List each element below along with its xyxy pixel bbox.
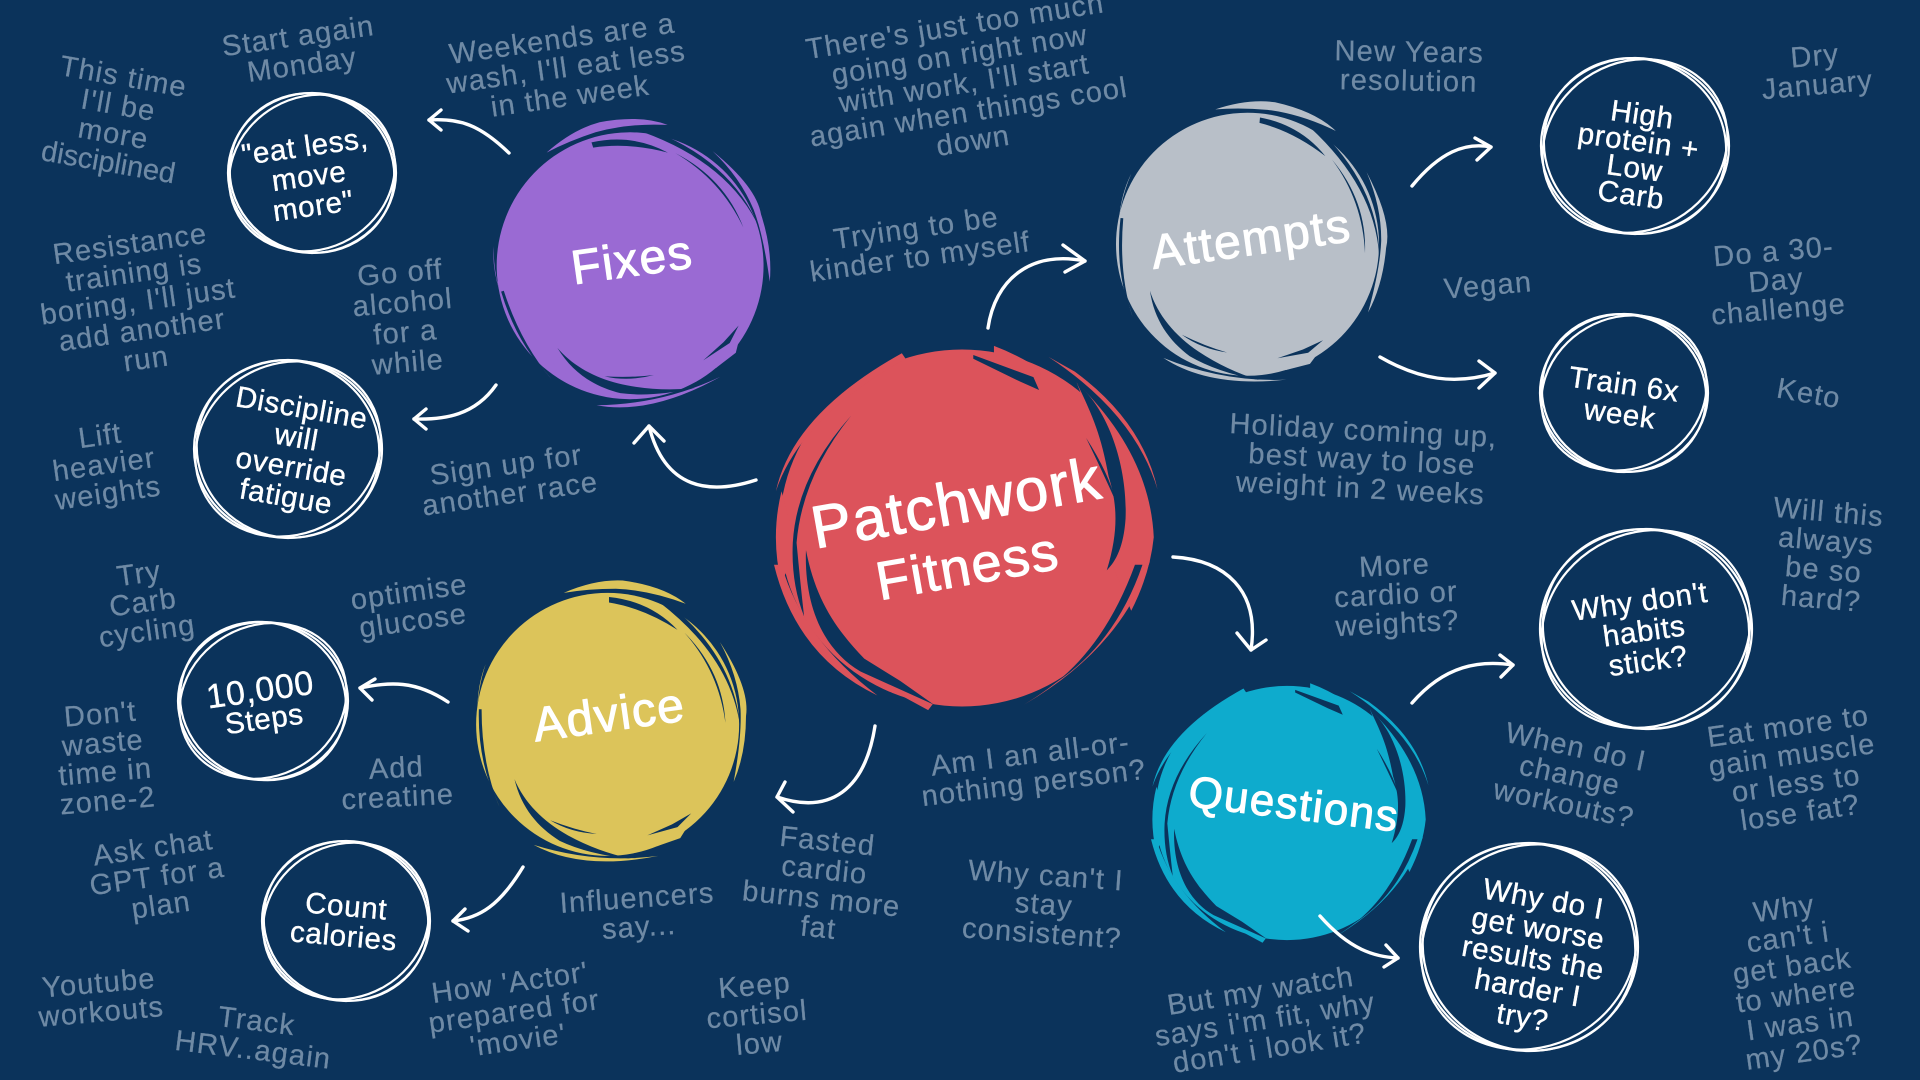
- callout: Why do I get worse results the harder I try?: try?: [1494, 997, 1551, 1038]
- note: Fasted cardio burns more fat: cardio: [780, 850, 869, 891]
- note: Ask chat GPT for a plan: Ask chat: [91, 824, 215, 873]
- note: This time I'll be more disciplined: I'll be: [79, 83, 158, 128]
- note: Start again Monday: Monday: [245, 42, 359, 89]
- arrow: Attempts to Train 6x: [1380, 357, 1495, 388]
- note: Weekends are a wash: wash, I'll eat less: [444, 35, 688, 101]
- circle: Questions: [1151, 683, 1428, 943]
- callout: Why do I get worse results the harder I try?: [1384, 805, 1674, 1080]
- note: Am I an all-or-nothing person?: Am I an all-or-: [929, 727, 1132, 783]
- note: Resistance training is boring: boring, I'll just: [38, 272, 238, 332]
- callout: Train 6x week: Train 6x: [1567, 361, 1681, 409]
- circle: Patchwork Fitness: [774, 346, 1158, 710]
- arrow: Questions to Why do I get worse: [1320, 916, 1398, 967]
- callout: Why do I get worse results the harder I try?: get worse: [1469, 901, 1607, 957]
- callout: Train 6x week: [1513, 286, 1735, 500]
- note: Dry January: January: [1760, 65, 1874, 106]
- note: How 'Actor' prepared: 'movie': [468, 1018, 568, 1063]
- note: Why can't i get back to where I was in my 20s?: can't i: [1745, 916, 1832, 960]
- note: Don't waste time in zone-2: waste: [60, 724, 145, 763]
- note: Will this always be so hard?: hard?: [1780, 580, 1862, 619]
- note: Keep cortisol low: Keep: [717, 967, 792, 1005]
- callout: eat less, move more: move: [270, 155, 348, 198]
- note: This time I'll be more disciplined: disciplined: [39, 135, 178, 190]
- note: But my watch says i'm fit: says i'm fit, why: [1153, 987, 1378, 1053]
- callout: 10,000 Steps: 10,000: [204, 664, 316, 716]
- circle: Advice: [476, 580, 746, 861]
- note: Why can't i get back to where I was in my 20s?: get back: [1731, 942, 1853, 991]
- circle: Advice: Advice: [530, 679, 689, 752]
- note: Try Carb cycling: Carb: [107, 582, 179, 624]
- callout: Why don't habits stick?: Why don't: [1570, 576, 1710, 628]
- callout: High protein + Low Carb: Low: [1605, 148, 1665, 189]
- callout: Why don't habits stick?: stick?: [1607, 639, 1690, 683]
- callout: eat less, move more: "eat less,: [240, 122, 370, 172]
- note: Fasted cardio burns more fat: fat: [799, 910, 838, 946]
- note: Resistance training is boring: training is: [64, 248, 204, 299]
- callout: High protein + Low Carb: Carb: [1596, 174, 1666, 216]
- note: Eat more to gain muscle: Eat more to: [1705, 700, 1871, 754]
- note: optimise glucose: optimise: [349, 569, 470, 617]
- note: When do I change workouts?: change: [1516, 750, 1623, 802]
- note: Try Carb cycling: cycling: [97, 609, 197, 654]
- note: Track HRV..again: Track: [216, 1001, 297, 1042]
- callout: Discipline will override fatigue: [163, 328, 413, 570]
- callout: Count calories: Count: [304, 887, 389, 927]
- arrow: Fixes to eat less: [429, 110, 509, 153]
- note: Don't waste time in zone-2: zone-2: [59, 781, 157, 821]
- callout: Discipline will override fatigue: will: [271, 417, 321, 458]
- note: Lift heavier weights: weights: [52, 470, 163, 517]
- note: Keep cortisol low: low: [735, 1026, 784, 1062]
- note: optimise glucose: glucose: [357, 598, 469, 645]
- note: Holiday coming up: weight in 2 weeks: [1234, 466, 1486, 511]
- note: Trying to be kinder: kinder to myself: [808, 226, 1032, 289]
- note: How 'Actor' prepared: prepared for: [427, 984, 602, 1040]
- note: This time I'll be more disciplined: more: [76, 112, 151, 156]
- note: Am I an all-or-nothing person?: nothing person?: [920, 754, 1148, 813]
- note: There's just too much: down: [934, 120, 1012, 163]
- note: Do a 30-Day challenge: challenge: [1710, 288, 1847, 332]
- note: When do I change workouts?: workouts?: [1490, 774, 1637, 835]
- note: Eat more to gain muscle: or less to: [1730, 759, 1863, 809]
- note: Track HRV..again: HRV..again: [173, 1025, 333, 1076]
- note: Eat more to gain muscle: gain muscle: [1707, 728, 1878, 783]
- note: Youtube workouts: Youtube: [41, 963, 157, 1004]
- note: Why can't I stay consistent?: stay: [1014, 887, 1074, 923]
- callout: Discipline will override fatigue: fatigue: [237, 472, 335, 521]
- note: Weekends are a wash: Weekends are a: [447, 8, 677, 71]
- arrow: center to Attempts: [988, 245, 1085, 328]
- callout: Discipline will override fatigue: Discipline: [233, 380, 370, 436]
- callout: Count calories: [234, 813, 458, 1029]
- note: Resistance training is boring: Resistance: [51, 218, 209, 271]
- note: Why can't i get back to where I was in my 20s?: my 20s?: [1744, 1029, 1865, 1077]
- circle: Patchwork Fitness: Fitness: [871, 521, 1064, 612]
- note: When do I change workouts?: When do I: [1503, 717, 1649, 778]
- note: Keto: Keto: [1774, 373, 1843, 415]
- note: Go off alcohol: Go off: [356, 253, 444, 293]
- circle: Fixes: [458, 83, 807, 439]
- note: Lift heavier weights: Lift: [76, 417, 124, 455]
- note: Resistance training is boring: run: [121, 340, 171, 378]
- callout: Discipline will override fatigue: override: [233, 441, 349, 493]
- callout: High protein + Low Carb: High: [1608, 94, 1676, 136]
- note: Holiday coming up: best way to lose: [1248, 438, 1476, 482]
- note: Try Carb cycling: Try: [115, 555, 163, 593]
- note: Why can't I stay consistent?: consistent?: [961, 912, 1123, 955]
- note: But my watch says i'm fit: don't i look it?: [1171, 1018, 1369, 1080]
- note: Eat more to gain muscle: lose fat?: [1738, 789, 1862, 837]
- arrow: center to Fixes: [634, 426, 756, 487]
- note: Sign up for another race: another race: [420, 466, 600, 523]
- note: Lift heavier weights: heavier: [51, 442, 158, 488]
- circle: Fixes: Fixes: [568, 226, 696, 295]
- callout: Why don't habits stick?: [1505, 492, 1787, 766]
- circle: Attempts: Attempts: [1148, 199, 1354, 280]
- note: Add creatine: Add: [368, 751, 425, 786]
- note: Do a 30-Day challenge: Day: [1747, 263, 1805, 299]
- callout: Why do I get worse results the harder I try?: Why do I: [1480, 873, 1606, 926]
- callout: eat less, move more: [200, 65, 424, 281]
- note: There's just too much: going on right now: [829, 19, 1090, 91]
- note: Ask chat GPT for a plan: GPT for a: [88, 852, 227, 902]
- note: Keep cortisol low: cortisol: [705, 995, 809, 1035]
- note: Go off alcohol: for a: [372, 314, 439, 352]
- note: Holiday coming up: Holiday coming up,: [1229, 408, 1498, 454]
- arrow: Fixes to Discipline: [414, 385, 496, 429]
- callout: 10,000 Steps: Steps: [223, 698, 306, 741]
- arrow: center to Advice: [777, 726, 875, 812]
- note: Do a 30-Day challenge: Do a 30-: [1712, 231, 1835, 273]
- callout: High protein + Low Carb: [1511, 26, 1759, 266]
- note: Resistance training is boring: add another: [57, 303, 228, 358]
- callout: Why do I get worse results the harder I try?: harder I: [1472, 962, 1583, 1014]
- note: Sign up for another race: Sign up for: [428, 439, 584, 492]
- note: Don't waste time in zone-2: time in: [57, 752, 153, 792]
- callout: Why don't habits stick?: habits: [1601, 609, 1687, 654]
- arrow: Advice to Count calories: [453, 867, 523, 931]
- note: Weekends are a wash: in the week: [489, 70, 652, 124]
- note: Fasted cardio burns more fat: Fasted: [778, 821, 877, 863]
- note: Ask chat GPT for a plan: plan: [129, 886, 193, 926]
- note: But my watch says i'm fit: But my watch: [1165, 961, 1356, 1022]
- note: How 'Actor' prepared: How 'Actor': [430, 956, 591, 1010]
- callout: Count calories: calories: [289, 915, 399, 958]
- note: Will this always be so hard?: be so: [1784, 551, 1863, 590]
- note: Why can't i get back to where I was in my 20s?: I was in: [1745, 1001, 1856, 1047]
- note: Youtube workouts: workouts: [36, 991, 165, 1034]
- callout: Train 6x week: week: [1581, 393, 1658, 436]
- note: Why can't i get back to where I was in my 20s?: Why: [1751, 889, 1817, 929]
- note: Influencers say...: say...: [601, 909, 677, 946]
- circle: Questions: Questions: [1186, 767, 1402, 842]
- note: Trying to be kinder: Trying to be: [831, 201, 1001, 256]
- note: Add creatine: creatine: [341, 779, 455, 816]
- circle: Patchwork Fitness: Patchwork: [806, 445, 1107, 561]
- note: New Years resolution: resolution: [1340, 64, 1478, 99]
- callout: High protein + Low Carb: protein +: [1576, 117, 1701, 166]
- note: Start again Monday: Start again: [220, 10, 376, 63]
- note: Fasted cardio burns more fat: burns more: [741, 875, 902, 924]
- arrow: Advice to 10,000 Steps: [360, 679, 448, 702]
- arrow: Questions to Why don't habits stick: [1412, 655, 1513, 703]
- note: This time I'll be more disciplined: This time: [57, 50, 189, 104]
- note: Why can't I stay consistent?: Why can't I: [967, 855, 1125, 897]
- note: Vegan: Vegan: [1443, 266, 1533, 306]
- note: More cardio or weights?: More: [1358, 548, 1431, 584]
- callout: 10,000 Steps: [151, 593, 375, 809]
- note: Why can't i get back to where I was in my 20s?: to where: [1734, 971, 1858, 1020]
- note: Influencers say...: Influencers: [559, 877, 716, 920]
- note: More cardio or weights?: cardio or: [1333, 576, 1459, 614]
- callout: Why do I get worse results the harder I try?: results the: [1459, 930, 1607, 987]
- note: Will this always be so hard?: always: [1777, 521, 1875, 562]
- note: New Years resolution: New Years: [1334, 35, 1484, 70]
- arrow: center to Questions: [1173, 557, 1266, 650]
- note: Don't waste time in zone-2: Don't: [63, 696, 138, 734]
- note: There's just too much: again when things cool: [807, 72, 1130, 154]
- note: Will this always be so hard?: Will this: [1772, 492, 1885, 533]
- callout: eat less, move more: more": [271, 184, 356, 228]
- note: More cardio or weights?: weights?: [1334, 605, 1460, 643]
- note: Go off alcohol: alcohol: [351, 283, 454, 323]
- arrow: Attempts to High protein: [1412, 138, 1491, 186]
- circle: Attempts: [1105, 89, 1398, 393]
- note: There's just too much: with work, I'll start: [836, 48, 1092, 120]
- note: Dry January: Dry: [1789, 38, 1840, 75]
- note: Go off alcohol: while: [370, 344, 445, 382]
